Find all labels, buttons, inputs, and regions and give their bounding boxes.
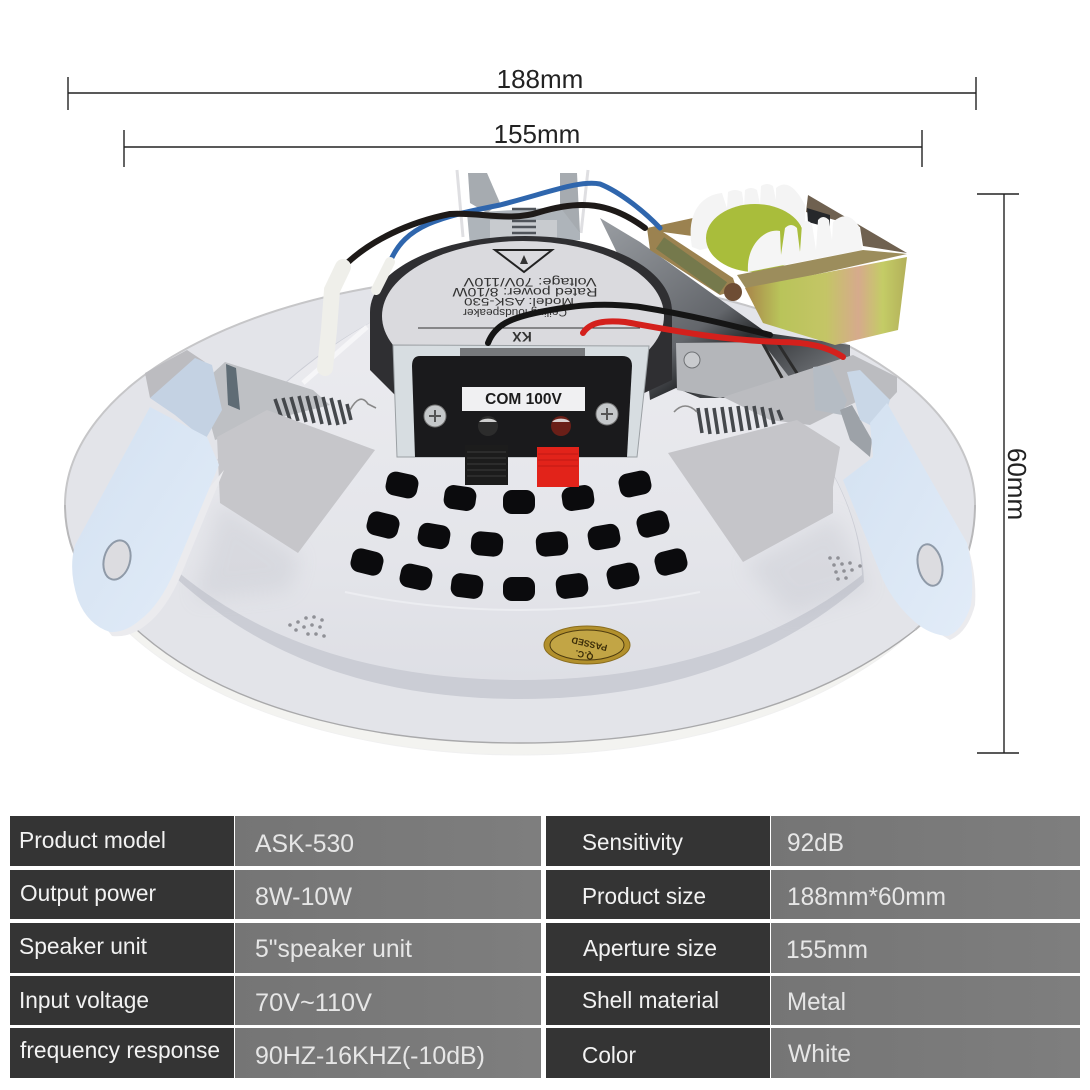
perforated patch, right bbox=[828, 556, 862, 581]
white splice sleeve, right bbox=[376, 262, 390, 290]
row: input voltage / shell material bbox=[10, 976, 1080, 1025]
speaker grille holes bbox=[349, 469, 689, 601]
specification table bbox=[10, 816, 1080, 1078]
row: frequency response / color: 90HZ-16KHZ(-10dB) bbox=[255, 1042, 485, 1070]
row: input voltage / shell material: Input voltage bbox=[19, 987, 149, 1013]
upside-down label text: Model: ASK-530 bbox=[464, 295, 574, 307]
transformer back frame bbox=[647, 218, 737, 295]
row: input voltage / shell material: Metal bbox=[787, 988, 846, 1016]
Q.C. passed seal: PASSED bbox=[570, 635, 608, 653]
left back plates bbox=[145, 350, 330, 440]
upside-down label text: Ceiling loudspeaker bbox=[463, 306, 567, 318]
row: frequency response / color bbox=[10, 1028, 1080, 1078]
warning triangle on label bbox=[495, 250, 552, 272]
black terminal housing bbox=[412, 356, 632, 457]
outer disc with white lip bbox=[65, 275, 975, 755]
screws bbox=[424, 403, 618, 427]
Q.C. passed seal bbox=[544, 626, 630, 664]
Q.C. passed seal: Q.C. bbox=[574, 648, 594, 662]
row: input voltage / shell material: Shell material bbox=[582, 987, 719, 1013]
core screw bbox=[724, 283, 742, 301]
row: product model / sensitivity: ASK-530 bbox=[255, 830, 354, 858]
left spring clip bbox=[72, 407, 224, 636]
row: speaker unit / aperture size bbox=[10, 923, 1080, 973]
transformer bbox=[647, 184, 907, 345]
row: output power / product size: 8W-10W bbox=[255, 883, 352, 911]
row: speaker unit / aperture size: Speaker unit bbox=[19, 933, 148, 959]
gray bracket behind transformer bbox=[600, 218, 850, 400]
right spring bbox=[674, 406, 782, 434]
metal plate bbox=[393, 345, 649, 457]
core rod bbox=[660, 243, 723, 288]
right front plate bbox=[668, 420, 840, 562]
left spring bbox=[275, 396, 376, 425]
coil former back bbox=[691, 184, 805, 250]
speaker magnet with label bbox=[370, 236, 672, 395]
soft shadows below the clips bbox=[195, 500, 870, 615]
terminal label bbox=[462, 387, 585, 411]
core top edge bbox=[737, 250, 907, 290]
width dimension: 188mm: 188mm bbox=[497, 64, 583, 94]
blue wire bbox=[390, 183, 660, 262]
top mounting bracket bbox=[457, 170, 588, 246]
white splice sleeve, left bbox=[325, 267, 343, 368]
row: product model / sensitivity bbox=[10, 816, 1080, 866]
row: input voltage / shell material: 70V~110V bbox=[255, 989, 372, 1017]
row: product model / sensitivity: Sensitivity bbox=[582, 829, 683, 855]
row: frequency response / color: frequency response bbox=[20, 1037, 220, 1063]
dome bevel bbox=[176, 320, 864, 699]
upper black wire bbox=[343, 205, 645, 267]
row: product model / sensitivity: 92dB bbox=[787, 829, 844, 857]
red wire bbox=[583, 321, 843, 357]
row: frequency response / color: White bbox=[788, 1040, 851, 1068]
black push button bbox=[465, 416, 508, 485]
core front face bbox=[745, 257, 907, 345]
row: speaker unit / aperture size: 155mm bbox=[786, 936, 868, 964]
perforated patch, left bbox=[288, 615, 326, 638]
upside-down label text: Rated power: 8/10W bbox=[452, 285, 598, 299]
row: output power / product size: 188mm*60mm bbox=[787, 883, 946, 911]
upside-down label text: KX bbox=[512, 329, 532, 345]
disc ridge beside the wires bbox=[303, 327, 367, 383]
lower black wire bbox=[488, 305, 770, 343]
right spring clip bbox=[843, 403, 975, 640]
row: output power / product size: Product size bbox=[582, 883, 706, 909]
terminal block bbox=[393, 345, 649, 487]
green winding bbox=[706, 204, 804, 272]
row: speaker unit / aperture size: Aperture size bbox=[583, 935, 717, 961]
upside-down label text bbox=[452, 275, 598, 345]
left front plate bbox=[217, 410, 375, 553]
coil former front bbox=[748, 216, 862, 272]
terminal label: COM 100V bbox=[485, 391, 562, 408]
row: speaker unit / aperture size: 5"speaker unit bbox=[255, 935, 412, 963]
speaker photo illustration bbox=[65, 170, 975, 755]
row: frequency response / color: Color bbox=[582, 1042, 636, 1068]
red push button bbox=[537, 416, 579, 487]
row: output power / product size bbox=[10, 870, 1080, 919]
upside-down label text: Voltage: 70V/110V bbox=[464, 275, 596, 289]
row: product model / sensitivity: Product model bbox=[19, 827, 166, 853]
dome top bbox=[178, 320, 862, 680]
row: output power / product size: Output power bbox=[20, 880, 156, 906]
aperture dimension: 155mm: 155mm bbox=[494, 119, 580, 149]
height dimension: 60mm: 60mm bbox=[1002, 448, 1032, 520]
right back plates bbox=[723, 355, 897, 457]
